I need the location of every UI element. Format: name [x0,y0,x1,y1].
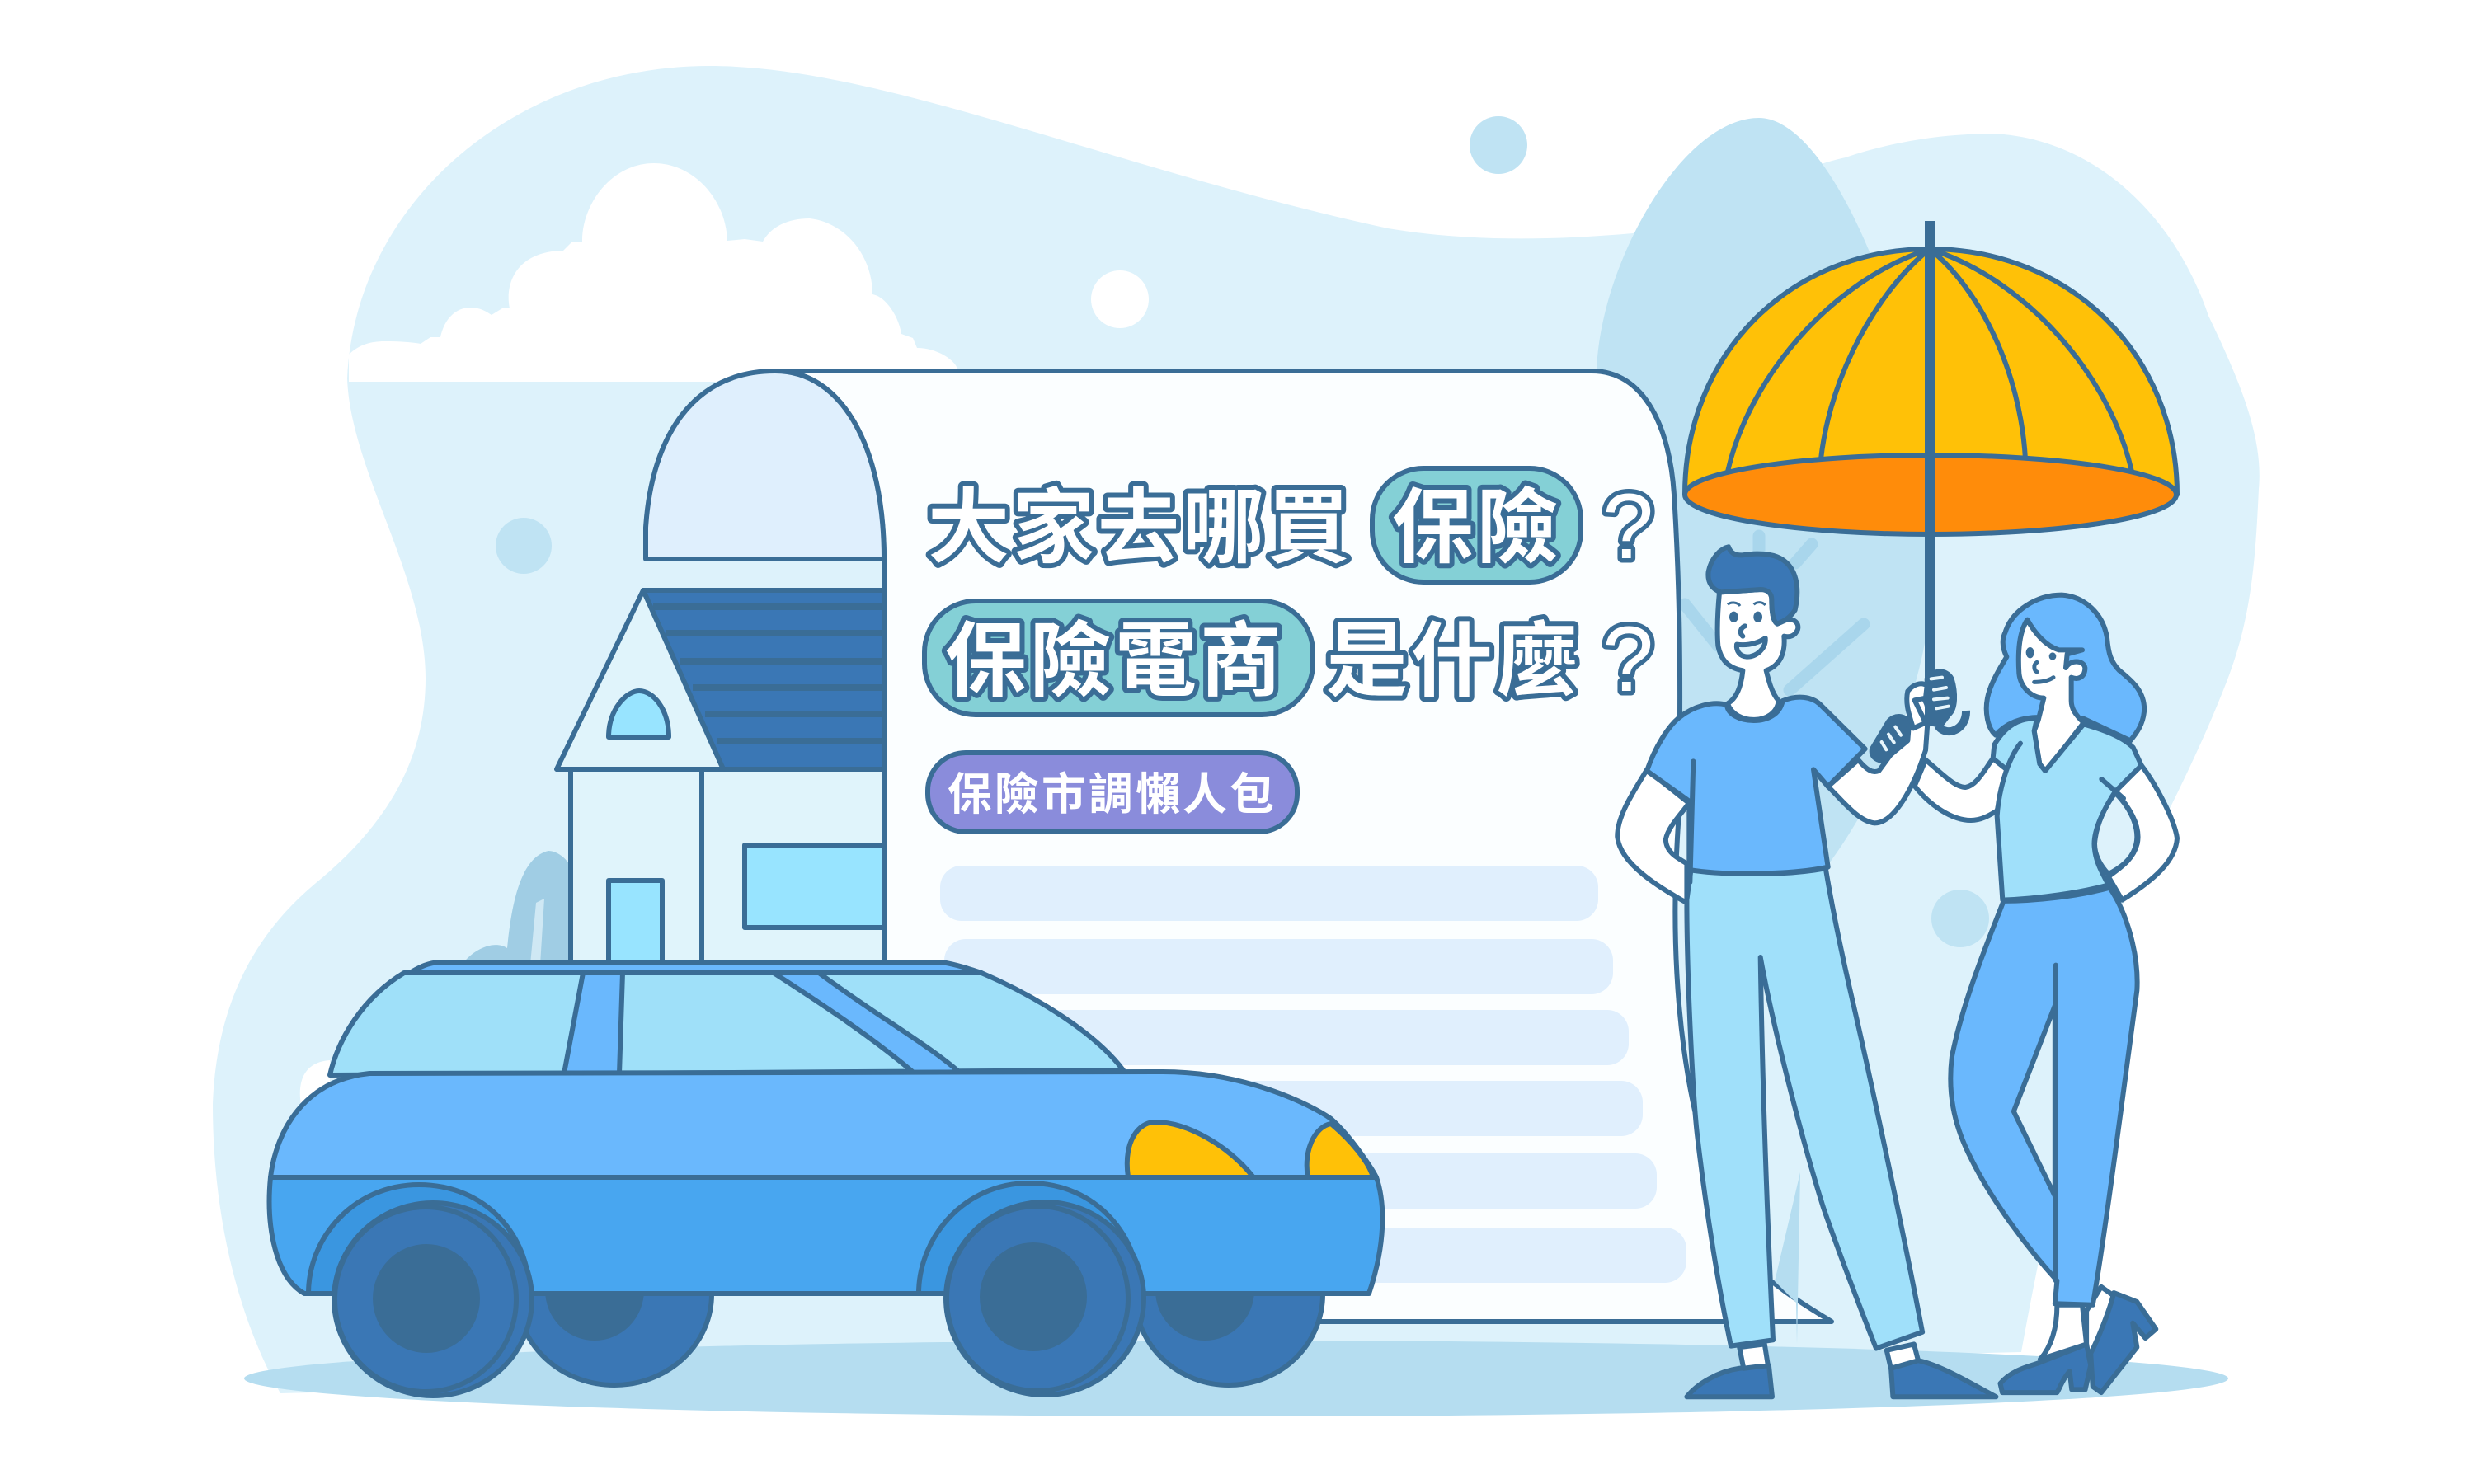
woman's upper body [1915,595,2177,900]
man's facial features [1728,603,1766,657]
highlight pill: insurance: 保險 [1392,481,1562,573]
highlight pill: insurance e-commerce: 保險電商 [945,615,1285,707]
scroll rolled top [646,371,884,559]
heading line 2 [924,601,1653,715]
car upper body [270,1072,1376,1177]
bush behind house [462,851,573,965]
umbrella canopy [1685,249,2177,495]
background blob [213,66,2260,1393]
woman's neck and face [2019,620,2085,771]
car roof [410,962,981,973]
umbrella handle hook [1938,711,1966,731]
wheel arches [308,1183,1140,1294]
man's t-shirt [1647,697,1865,874]
side window [745,845,882,928]
woman's right arm [2109,765,2177,900]
headlights [1127,1122,1373,1177]
subtitle pill [928,753,1297,832]
woman's hair [1987,595,2144,740]
white bump behind car [300,1060,330,1105]
man [1617,547,1996,1397]
document scroll [646,371,1832,1344]
man's right arm [1828,693,1928,823]
attic window [609,691,669,737]
car lower body [270,1177,1382,1294]
gap between arm and waist [2095,793,2137,874]
man's neck and face [1718,589,1798,720]
heading line 1: ? [1602,475,1653,578]
woman's facial features [2026,647,2056,682]
umbrella ribs [1728,249,2132,472]
umbrella [1685,221,2177,731]
woman's shoes and trousers [1950,888,2156,1392]
umbrella pole [1925,221,1935,726]
heading line 1: 大家去哪買 [928,481,1352,573]
house gable [557,590,723,769]
car pillars [564,973,961,1073]
decorative circles [496,116,1989,947]
ground shadow [244,1341,2228,1416]
hand on handle [1907,672,1954,728]
woman [1915,595,2177,1392]
front wheels [334,1202,1144,1396]
rear wheels [517,1204,1323,1385]
heading line 1 [928,468,1653,582]
subtitle pill: 保險市調懶人包 [948,770,1277,819]
watch [1872,716,1909,761]
car [270,962,1382,1396]
car glass [330,973,1123,1075]
umbrella underside [1685,455,2176,534]
man's lower body [1617,770,1996,1397]
man's upper body [1647,547,1928,882]
house [557,561,884,962]
woman's left arm [1915,758,2006,820]
woman's blouse [1993,719,2142,900]
heading line 2: 是什麼 [1326,615,1581,707]
heading line 2: ? [1602,608,1653,711]
scroll spike detail [1775,1172,1800,1344]
text placeholder rows [940,866,1686,1283]
front door [609,881,662,962]
background tree [1597,118,1934,866]
man's hair [1708,547,1797,624]
highlight pill: insurance [1372,468,1581,582]
cloud [349,163,957,382]
